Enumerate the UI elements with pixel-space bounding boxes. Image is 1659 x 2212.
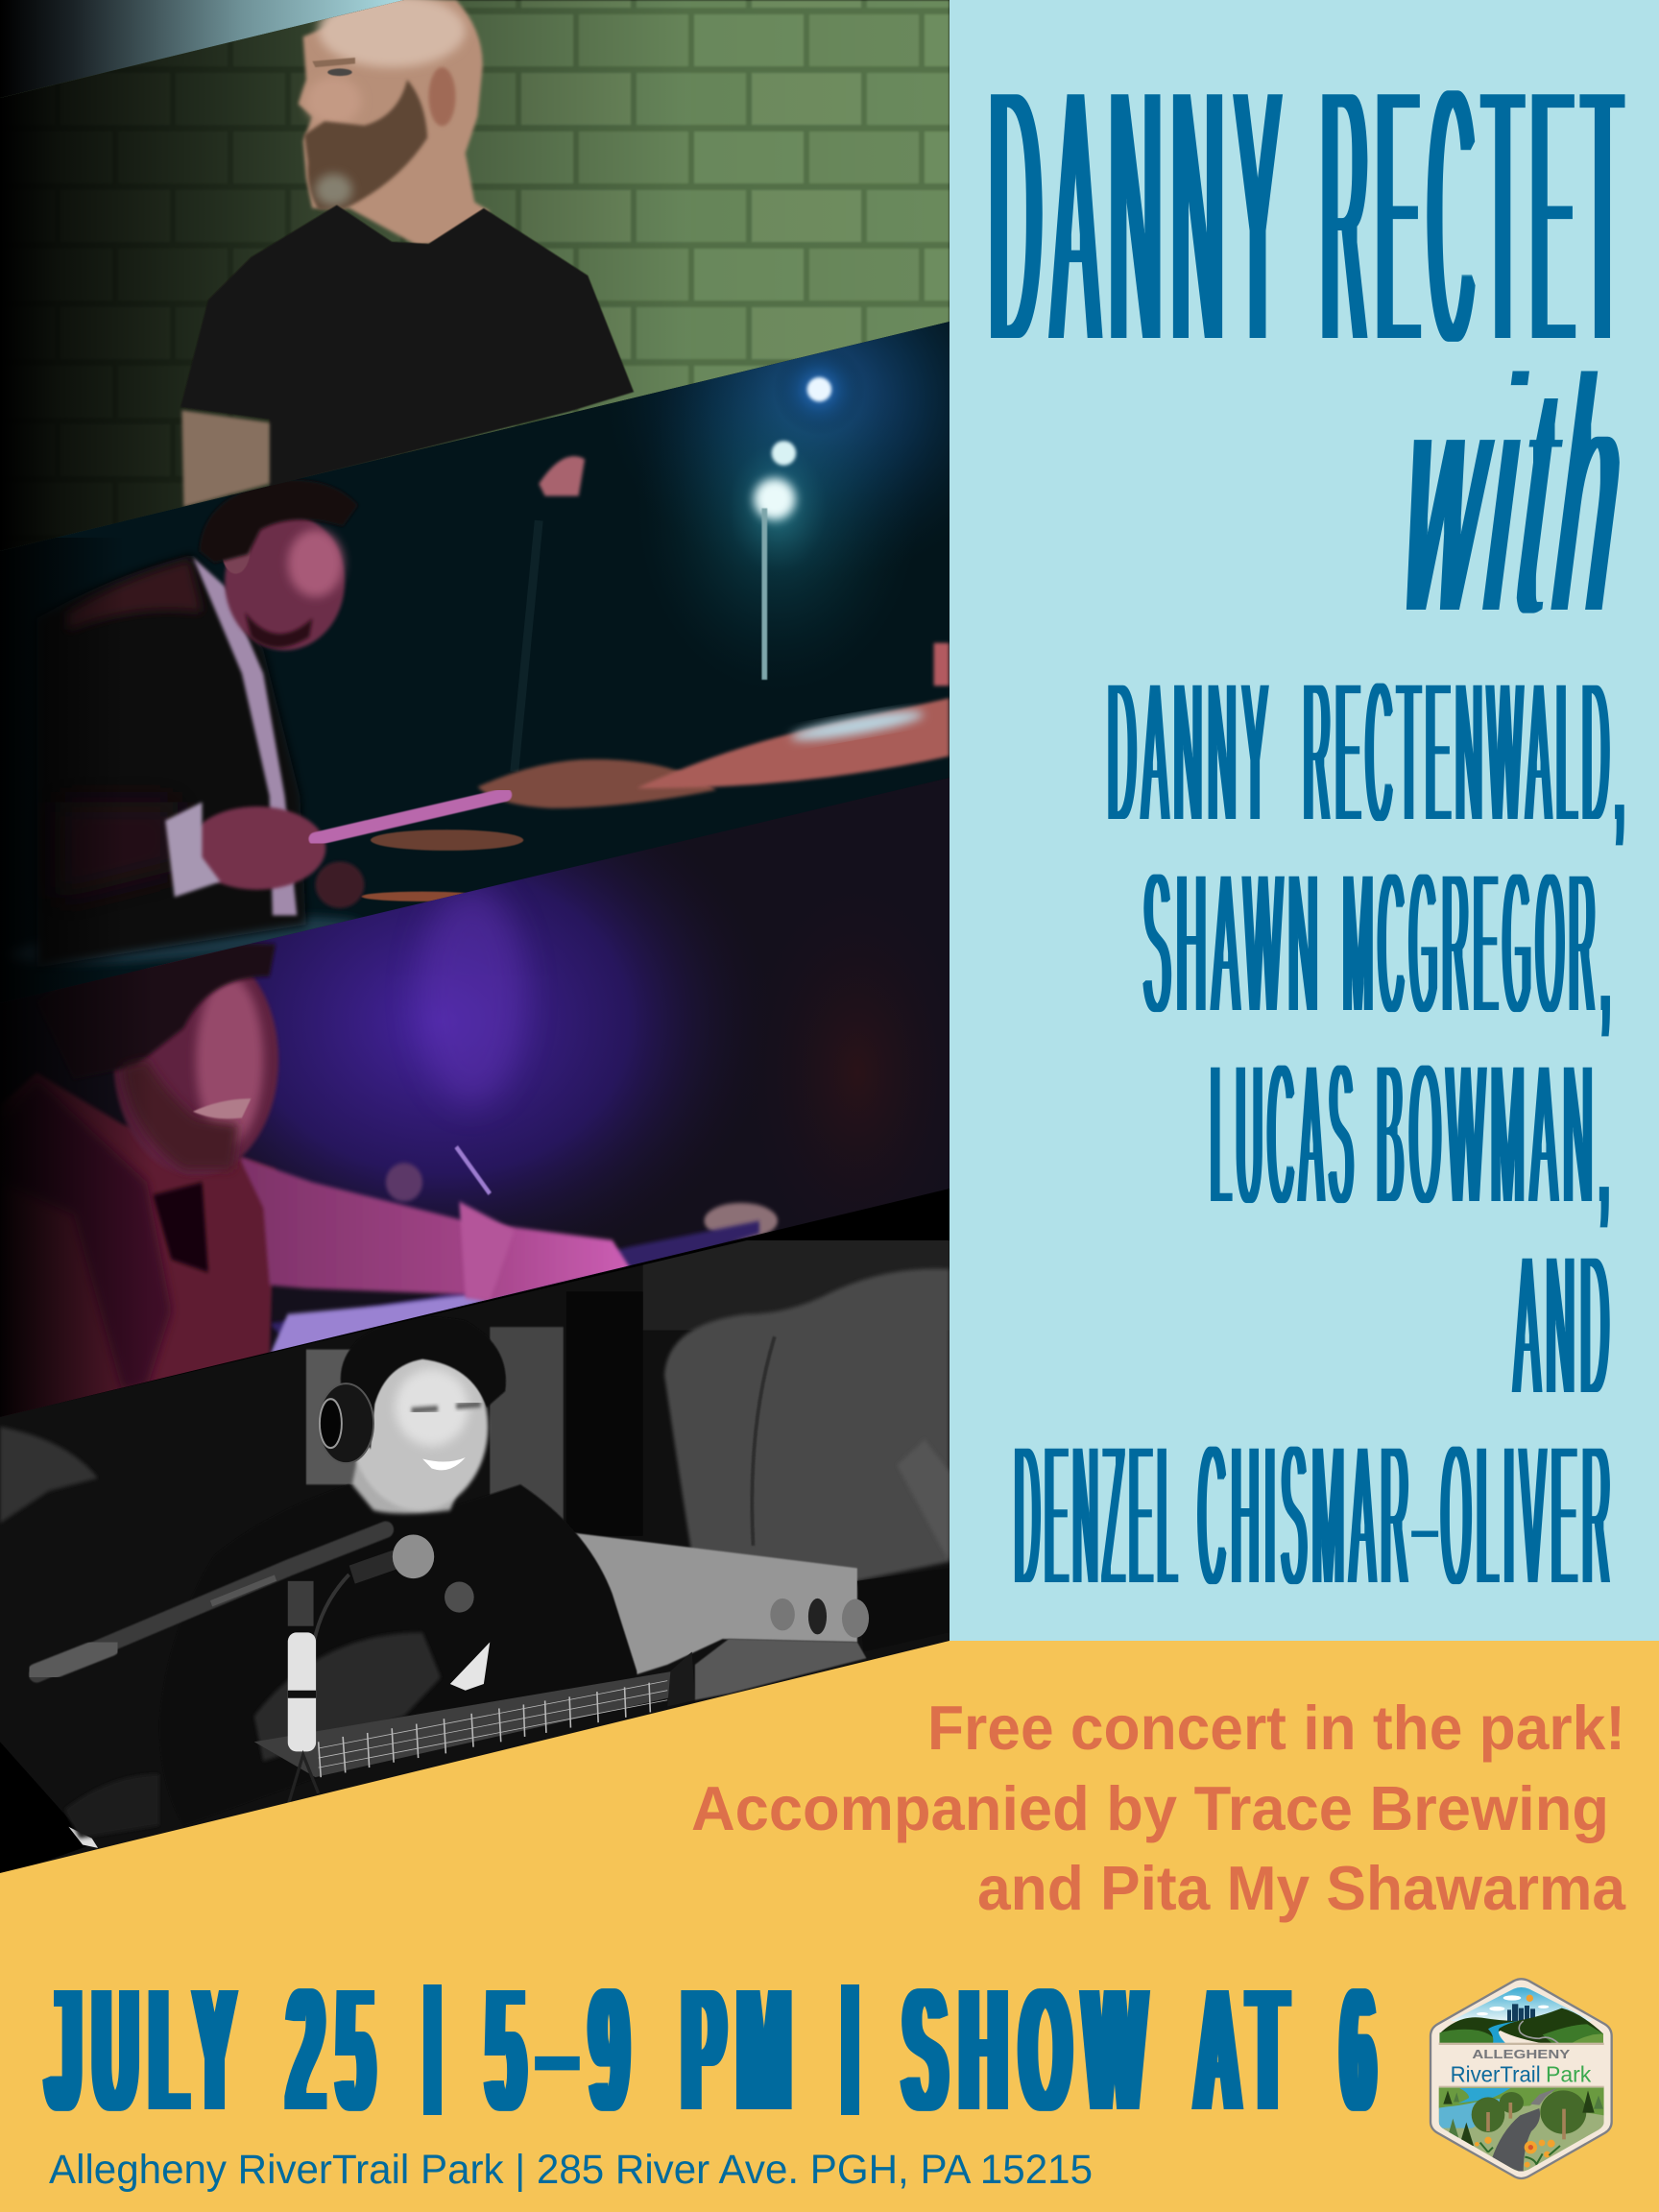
address: Allegheny RiverTrail Park | 285 River Ave. PGH, PA 15215 <box>49 2147 1093 2193</box>
bottom yellow panel <box>0 1641 1659 2212</box>
photo: drummer under blue stage lights <box>0 322 950 995</box>
callout: free concert details: Accompanied by Trace Brewing <box>691 1773 1609 1843</box>
photo: bassist in black and white <box>0 1229 950 1882</box>
logo wordmark <box>1451 2047 1592 2086</box>
date and time line: 25 <box>288 1951 387 2150</box>
text: 6 <box>1342 1951 1386 2150</box>
date and time line: PM <box>683 1951 804 2150</box>
callout: free concert details: Free concert in the park! <box>927 1693 1625 1763</box>
logo wordmark: ALLEGHENY <box>1472 2047 1570 2061</box>
band member names <box>1015 637 1630 1630</box>
callout: free concert details: and Pita My Shawarma <box>977 1853 1626 1923</box>
date and time line: SHOW <box>903 1951 1159 2150</box>
date separators <box>423 1984 859 2115</box>
date and time line <box>47 1951 1386 2150</box>
photo column: four diagonal band-member photos <box>0 0 1022 1882</box>
date and time line: JULY <box>47 1951 248 2150</box>
logo wordmark: RiverTrail <box>1451 2061 1541 2086</box>
corner gradient wedge <box>0 0 404 98</box>
date and time line: 5–9 <box>487 1951 642 2150</box>
callout: free concert details <box>691 1693 1626 1923</box>
logo wordmark: Park <box>1546 2061 1592 2086</box>
logo upper landscape <box>1437 1984 1606 2043</box>
photo: keyboardist in purple light <box>0 778 950 1417</box>
logo lower landscape <box>1437 2086 1606 2176</box>
logo: Allegheny RiverTrail Park badge <box>1431 1979 1612 2178</box>
date and time line: AT <box>1195 1951 1300 2150</box>
photo: Danny against green brick wall <box>0 0 950 576</box>
